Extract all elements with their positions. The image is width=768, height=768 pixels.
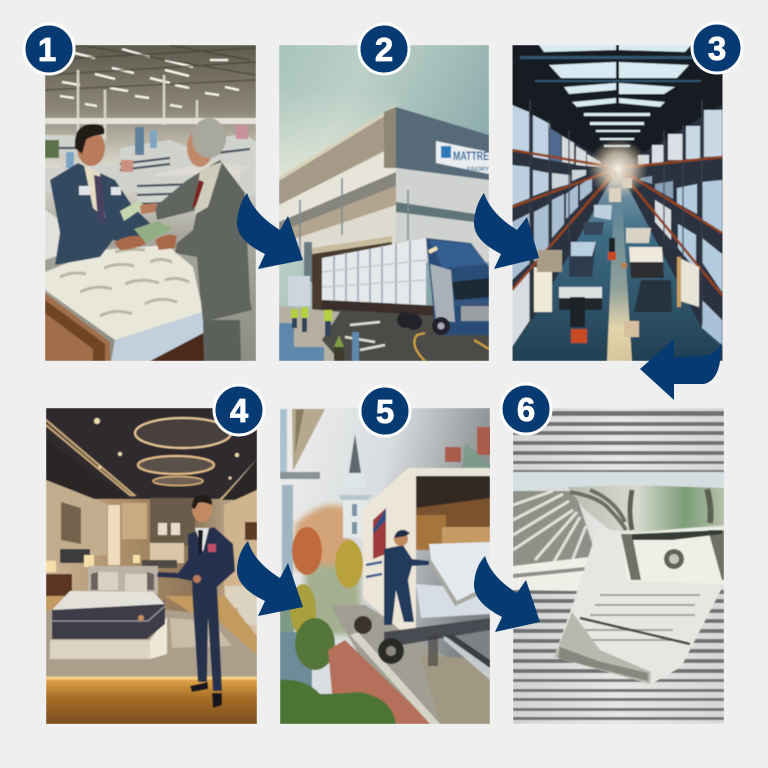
arrow: step 3 to step 4 bbox=[640, 339, 721, 400]
sub: blurred distance trees bbox=[295, 505, 360, 635]
sub: wall panels and furniture bbox=[46, 480, 257, 625]
badge 5: 5 bbox=[376, 393, 394, 430]
panel 5: delivery truck at home bbox=[280, 408, 491, 724]
sub: forklifts and boxes bbox=[570, 238, 639, 343]
sub: factory sign bbox=[436, 141, 489, 174]
panel 2: factory with loaded truck bbox=[279, 45, 489, 371]
badge 2: 2 bbox=[375, 31, 393, 68]
badge 3 bbox=[692, 23, 742, 73]
sub: asphalt ground bbox=[279, 306, 489, 361]
sub: blue truck cab bbox=[397, 238, 489, 335]
sub: factory building bbox=[279, 105, 489, 310]
sub: delivery worker bbox=[384, 530, 429, 625]
sub: green hedge bbox=[280, 680, 396, 724]
panel 6: cash stuffed under mattress bbox=[513, 408, 724, 724]
sub: mattress on wooden frame bbox=[45, 245, 205, 361]
badge 5 bbox=[360, 386, 410, 436]
sub: older buyer in grey suit bbox=[155, 118, 252, 361]
arrow: step 5 to step 6 bbox=[474, 556, 540, 632]
sub: cash changing hands bbox=[120, 201, 172, 243]
sub: right shelving bbox=[618, 100, 722, 350]
arrow: step 2 to step 3 bbox=[474, 193, 539, 269]
panel 3: warehouse aisle bbox=[512, 45, 723, 361]
sub: carpet and wood floor bbox=[46, 596, 257, 724]
badge 6: 6 bbox=[517, 391, 535, 428]
sub: mattress pallets on floor bbox=[534, 172, 699, 312]
sub: smiling salesman presenting bbox=[157, 495, 235, 708]
sub: rolled bills bbox=[567, 485, 724, 532]
sub: porch columns and cornice bbox=[280, 409, 325, 690]
badge 2 bbox=[359, 24, 409, 74]
panel 4: luxury mattress showroom bbox=[46, 408, 257, 724]
sub: ceiling skylights bbox=[520, 45, 716, 147]
badge 4 bbox=[214, 385, 264, 435]
sub: factory sign: MATTRE bbox=[453, 149, 489, 163]
sub: mattress lip bbox=[513, 472, 724, 491]
sub: factory sign: FAIORY bbox=[467, 167, 489, 173]
sub: dollar bill stacks bbox=[513, 491, 724, 684]
badge 3: 3 bbox=[708, 30, 726, 67]
sub: church steeple bbox=[338, 434, 372, 538]
panel 1: buying mattresses wholesale bbox=[45, 45, 256, 361]
sub: smiling salesman in navy suit bbox=[50, 124, 150, 265]
badge 6 bbox=[501, 384, 551, 434]
badge 1 bbox=[24, 24, 74, 74]
sub: houses behind truck bbox=[445, 427, 491, 470]
sub: left shelving bbox=[512, 100, 618, 347]
sub: showroom bed bbox=[50, 566, 167, 659]
badge 4: 4 bbox=[230, 392, 249, 429]
sub: white delivery truck bbox=[354, 468, 490, 680]
sub: autumn trees and bushes bbox=[290, 527, 363, 670]
sub: ceiling with light rings bbox=[46, 408, 257, 500]
sub: truck trailer with mattress cargo bbox=[322, 238, 440, 316]
arrow: step 1 to step 2 bbox=[237, 193, 303, 269]
sub: striped mattress bbox=[513, 411, 724, 720]
sub: road and brick walkway bbox=[328, 605, 490, 724]
badge 1: 1 bbox=[38, 31, 56, 68]
arrow: step 4 to step 5 bbox=[237, 541, 303, 616]
sub: pallets of mattresses and workers bbox=[279, 276, 359, 361]
sub: warehouse floor bbox=[512, 168, 722, 361]
